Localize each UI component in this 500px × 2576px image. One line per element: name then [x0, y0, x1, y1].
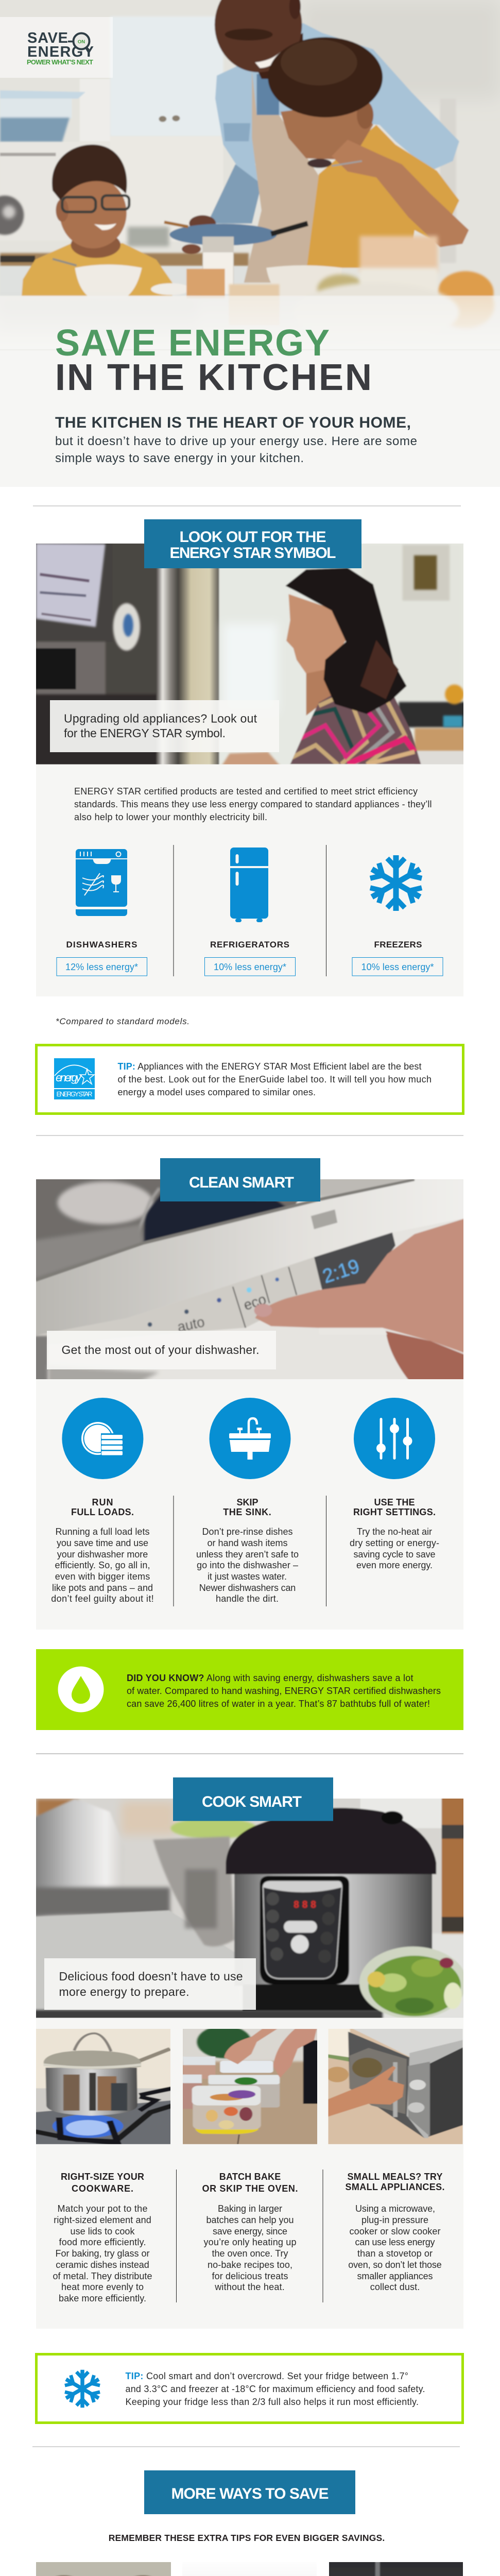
tip: batch bake: without the heat. — [214, 2282, 285, 2292]
tip text: TIP: Cool smart and don’t overcrowd. Set your fridge between 1.7° — [126, 2371, 408, 2381]
tip box: cool smart — [36, 2354, 462, 2422]
label: dishwashers: DISHWASHERS — [66, 940, 137, 950]
icon: dishes — [62, 1398, 143, 1479]
photo caption: more energy to prepare. — [59, 1985, 189, 1998]
label: refrigerators — [205, 940, 296, 976]
tip: skip the sink: Newer dishwashers can — [199, 1583, 296, 1593]
photo: pressure cooker: 888 — [294, 1899, 316, 1910]
photo: woman at the fridge — [32, 538, 468, 768]
tip: skip the sink — [196, 1497, 299, 1604]
icon: water drop — [58, 1666, 104, 1713]
tip: batch bake: BATCH BAKE — [219, 2172, 281, 2182]
tip: skip the sink: it just wastes water. — [208, 1571, 287, 1582]
tip: small appliances: oven, so don’t let those — [348, 2260, 442, 2270]
photo: microwave — [325, 2026, 465, 2147]
tip: batch bake: batches can help you — [206, 2215, 294, 2225]
hero photo: father and sons in kitchen — [0, 0, 500, 351]
tip: skip the sink: THE SINK. — [223, 1507, 271, 1517]
tip text: of the best. Look out for the EnerGuide label too. It will tell you how much — [117, 1074, 432, 1084]
tip: right-size your cookware: bake more efficiently. — [59, 2293, 146, 2303]
tip: small appliances: than a stovetop or — [357, 2248, 433, 2259]
tip: batch bake: no-bake recipes too, — [208, 2260, 292, 2270]
tip text: Keeping your fridge less than 2/3 full also helps it run most efficiently. — [126, 2397, 419, 2407]
tip: right-size your cookware: of metal. They distribute — [53, 2271, 152, 2281]
photo: unplugging cord — [179, 2557, 321, 2576]
icon: snowflake — [368, 855, 424, 911]
tip: right-size your cookware: right-sized element and — [54, 2215, 151, 2225]
photo: dishwasher controls — [32, 1175, 468, 1384]
intro text: THE KITCHEN IS THE HEART OF YOUR HOME, — [55, 414, 411, 431]
heading banner: energy star symbol: ENERGY STAR SYMBOL — [170, 545, 336, 562]
tip: small appliances: can use less energy — [355, 2237, 435, 2247]
photo: refrigerator coils — [36, 2562, 171, 2576]
hero grey panel — [0, 296, 500, 487]
icon: sink — [209, 1398, 290, 1479]
tip text — [117, 1061, 432, 1097]
tip text: TIP: Appliances with the ENERGY STAR Most Efficient label are the best — [117, 1061, 421, 1072]
logo: SAVE — [27, 30, 68, 46]
tip: right-size your cookware: use lids to cook — [70, 2226, 135, 2236]
tip: small appliances: smaller appliances — [357, 2271, 433, 2281]
description text: also help to lower your monthly electricity bill. — [74, 812, 267, 822]
tip: right-size your cookware: RIGHT-SIZE YOUR — [61, 2172, 144, 2182]
heading banner: clean smart: CLEAN SMART — [189, 1174, 294, 1191]
tip: batch bake: for delicious treats — [212, 2271, 288, 2281]
tip: use the right settings: Try the no-heat air — [357, 1527, 432, 1537]
tip: right-size your cookware — [53, 2172, 152, 2303]
intro text: simple ways to save energy in your kitchen. — [55, 451, 304, 465]
heading banner: clean smart — [160, 1158, 320, 1201]
tip: right-size your cookware: COOKWARE. — [72, 2183, 133, 2194]
heading banner: more ways to save — [144, 2470, 355, 2514]
tip: skip the sink: unless they aren’t safe to — [196, 1549, 299, 1560]
intro text: but it doesn’t have to drive up your energy use. Here are some — [55, 434, 417, 448]
tip: skip the sink: or hand wash items — [207, 1538, 287, 1548]
icon: sliders — [354, 1398, 435, 1479]
photo caption — [50, 700, 279, 752]
tip: run full loads: RUN — [92, 1497, 113, 1507]
title — [55, 323, 372, 398]
logo — [0, 17, 113, 78]
tip: use the right settings: RIGHT SETTINGS. — [353, 1507, 436, 1517]
tip: small appliances: SMALL MEALS? TRY — [347, 2172, 443, 2182]
panel: clean smart tips — [36, 1379, 463, 1630]
tip: run full loads: don’t feel guilty about it! — [51, 1594, 154, 1604]
heading banner: more ways to save: MORE WAYS TO SAVE — [171, 2485, 329, 2502]
photo caption: Get the most out of your dishwasher. — [62, 1343, 260, 1357]
tip: skip the sink: Don’t pre-rinse dishes — [202, 1527, 292, 1537]
label: refrigerators: REFRIGERATORS — [210, 940, 289, 950]
tip: right-size your cookware: ceramic dishes instead — [56, 2260, 149, 2270]
photo: dishwasher controls: 2:19 — [320, 1255, 362, 1287]
tip: small appliances: plug-in pressure — [361, 2215, 428, 2225]
icon: snowflake — [63, 2370, 102, 2408]
photo caption — [44, 1958, 256, 2010]
tip: use the right settings: USE THE — [374, 1497, 415, 1507]
tip: run full loads: even with bigger items — [55, 1571, 150, 1582]
footnote: *Compared to standard models. — [56, 1016, 189, 1026]
tip: batch bake: the oven once. Try — [212, 2248, 288, 2259]
logo: POWER WHAT’S NEXT — [27, 58, 93, 66]
tip: batch bake: OR SKIP THE OVEN. — [202, 2183, 298, 2194]
tip: skip the sink: SKIP — [237, 1497, 258, 1507]
icon: energy star logo: energy — [56, 1071, 82, 1084]
tip: batch bake — [202, 2172, 298, 2292]
logo: ENERGY — [27, 44, 94, 60]
father — [215, 23, 459, 181]
tip: right-size your cookware: For baking, try glass or — [56, 2248, 149, 2259]
tip: batch bake: save energy, since — [213, 2226, 287, 2236]
logo: ON — [78, 39, 85, 45]
tip: run full loads: like pots and pans – and — [52, 1583, 153, 1593]
tip: small appliances: Using a microwave, — [355, 2204, 435, 2214]
tip box: most efficient label — [36, 1045, 463, 1114]
tip: run full loads — [51, 1497, 154, 1604]
icon: dishwasher — [76, 849, 127, 916]
tip: use the right settings — [350, 1497, 439, 1570]
icon: refrigerator — [230, 848, 268, 922]
photo caption: for the ENERGY STAR symbol. — [64, 726, 226, 740]
tip: use the right settings: saving cycle to save — [353, 1549, 436, 1560]
photo caption — [47, 1331, 276, 1369]
heading banner: energy star symbol: LOOK OUT FOR THE — [179, 529, 326, 546]
photo: dishwasher controls: eco — [242, 1291, 268, 1313]
panel: certified appliances — [36, 765, 463, 996]
photo: changing a light bulb — [329, 2562, 463, 2576]
tip: use the right settings: dry setting or energy- — [350, 1538, 439, 1548]
tip: small appliances: SMALL APPLIANCES. — [345, 2182, 445, 2192]
photo: pot on gas stove — [33, 2026, 173, 2147]
icon: energy star logo: ENERGY STAR — [57, 1090, 93, 1098]
callout text: DID YOU KNOW? Along with saving energy, dishwashers save a lot — [127, 1673, 413, 1683]
tip text: and 3.3°C and freezer at -18°C for maximum efficiency and food safety. — [126, 2384, 425, 2394]
boy right — [307, 125, 459, 268]
icon: energy star logo — [54, 1058, 95, 1099]
tip: run full loads: your dishwasher more — [57, 1549, 148, 1560]
table items — [53, 259, 77, 265]
tip text — [126, 2371, 425, 2407]
tip: batch bake: you’re only heating up — [204, 2237, 297, 2247]
callout text — [127, 1673, 441, 1709]
label: dishwashers: 12% less energy* — [65, 962, 138, 972]
callout text: can save 26,400 litres of water in a year. That’s 87 bathtubs full of water! — [127, 1699, 430, 1709]
tip: small appliances — [345, 2172, 445, 2292]
tip: small appliances: cooker or slow cooker — [349, 2226, 441, 2236]
intro text — [55, 414, 417, 465]
label: freezers: FREEZERS — [374, 940, 422, 950]
tip: skip the sink: handle the dirt. — [216, 1594, 279, 1604]
photo caption: Delicious food doesn’t have to use — [59, 1970, 243, 1983]
label: refrigerators: 10% less energy* — [214, 962, 286, 972]
tip: small appliances: collect dust. — [370, 2282, 420, 2292]
heading banner: cook smart: COOK SMART — [202, 1793, 302, 1810]
description text — [74, 786, 432, 822]
tip: run full loads: efficiently. So, go all in, — [55, 1560, 150, 1570]
tip: right-size your cookware: food more efficiently. — [59, 2237, 146, 2247]
description text: standards. This means they use less energy compared to standard appliances - they’ll — [74, 799, 432, 809]
panel: cook smart tips — [33, 2018, 465, 2329]
tip: use the right settings: even more energy. — [356, 1560, 433, 1570]
tip: run full loads: Running a full load lets — [56, 1527, 149, 1537]
subheading: REMEMBER THESE EXTRA TIPS FOR EVEN BIGGER SAVINGS. — [109, 2533, 385, 2543]
heading banner: energy star symbol — [144, 519, 361, 568]
label: freezers: 10% less energy* — [361, 962, 434, 972]
tip: batch bake: Baking in larger — [218, 2204, 282, 2214]
callout text: of water. Compared to hand washing, ENERGY STAR certified dishwashers — [127, 1686, 441, 1696]
tip text: energy a model uses compared to similar ones. — [117, 1087, 316, 1097]
photo: pressure cooker — [32, 1794, 468, 2022]
boy left — [22, 243, 172, 296]
photo caption: Upgrading old appliances? Look out — [64, 712, 257, 725]
tip: right-size your cookware: Match your pot to the — [58, 2204, 147, 2214]
label: freezers — [352, 940, 443, 976]
heading banner: cook smart — [173, 1777, 333, 1821]
photo: dishwasher controls: auto — [176, 1313, 206, 1335]
title: IN THE KITCHEN — [55, 357, 372, 398]
title: SAVE ENERGY — [55, 323, 330, 364]
photo: meal prep containers — [180, 2026, 319, 2147]
callout: did you know — [36, 1649, 463, 1730]
label: dishwashers — [57, 940, 147, 976]
description text: ENERGY STAR certified products are tested and certified to meet strict efficiency — [74, 786, 418, 796]
tip: skip the sink: go into the dishwasher – — [197, 1560, 298, 1570]
tip: right-size your cookware: heat more evenly to — [61, 2282, 144, 2292]
tip: run full loads: FULL LOADS. — [71, 1507, 134, 1517]
tip: run full loads: you save time and use — [57, 1538, 148, 1548]
